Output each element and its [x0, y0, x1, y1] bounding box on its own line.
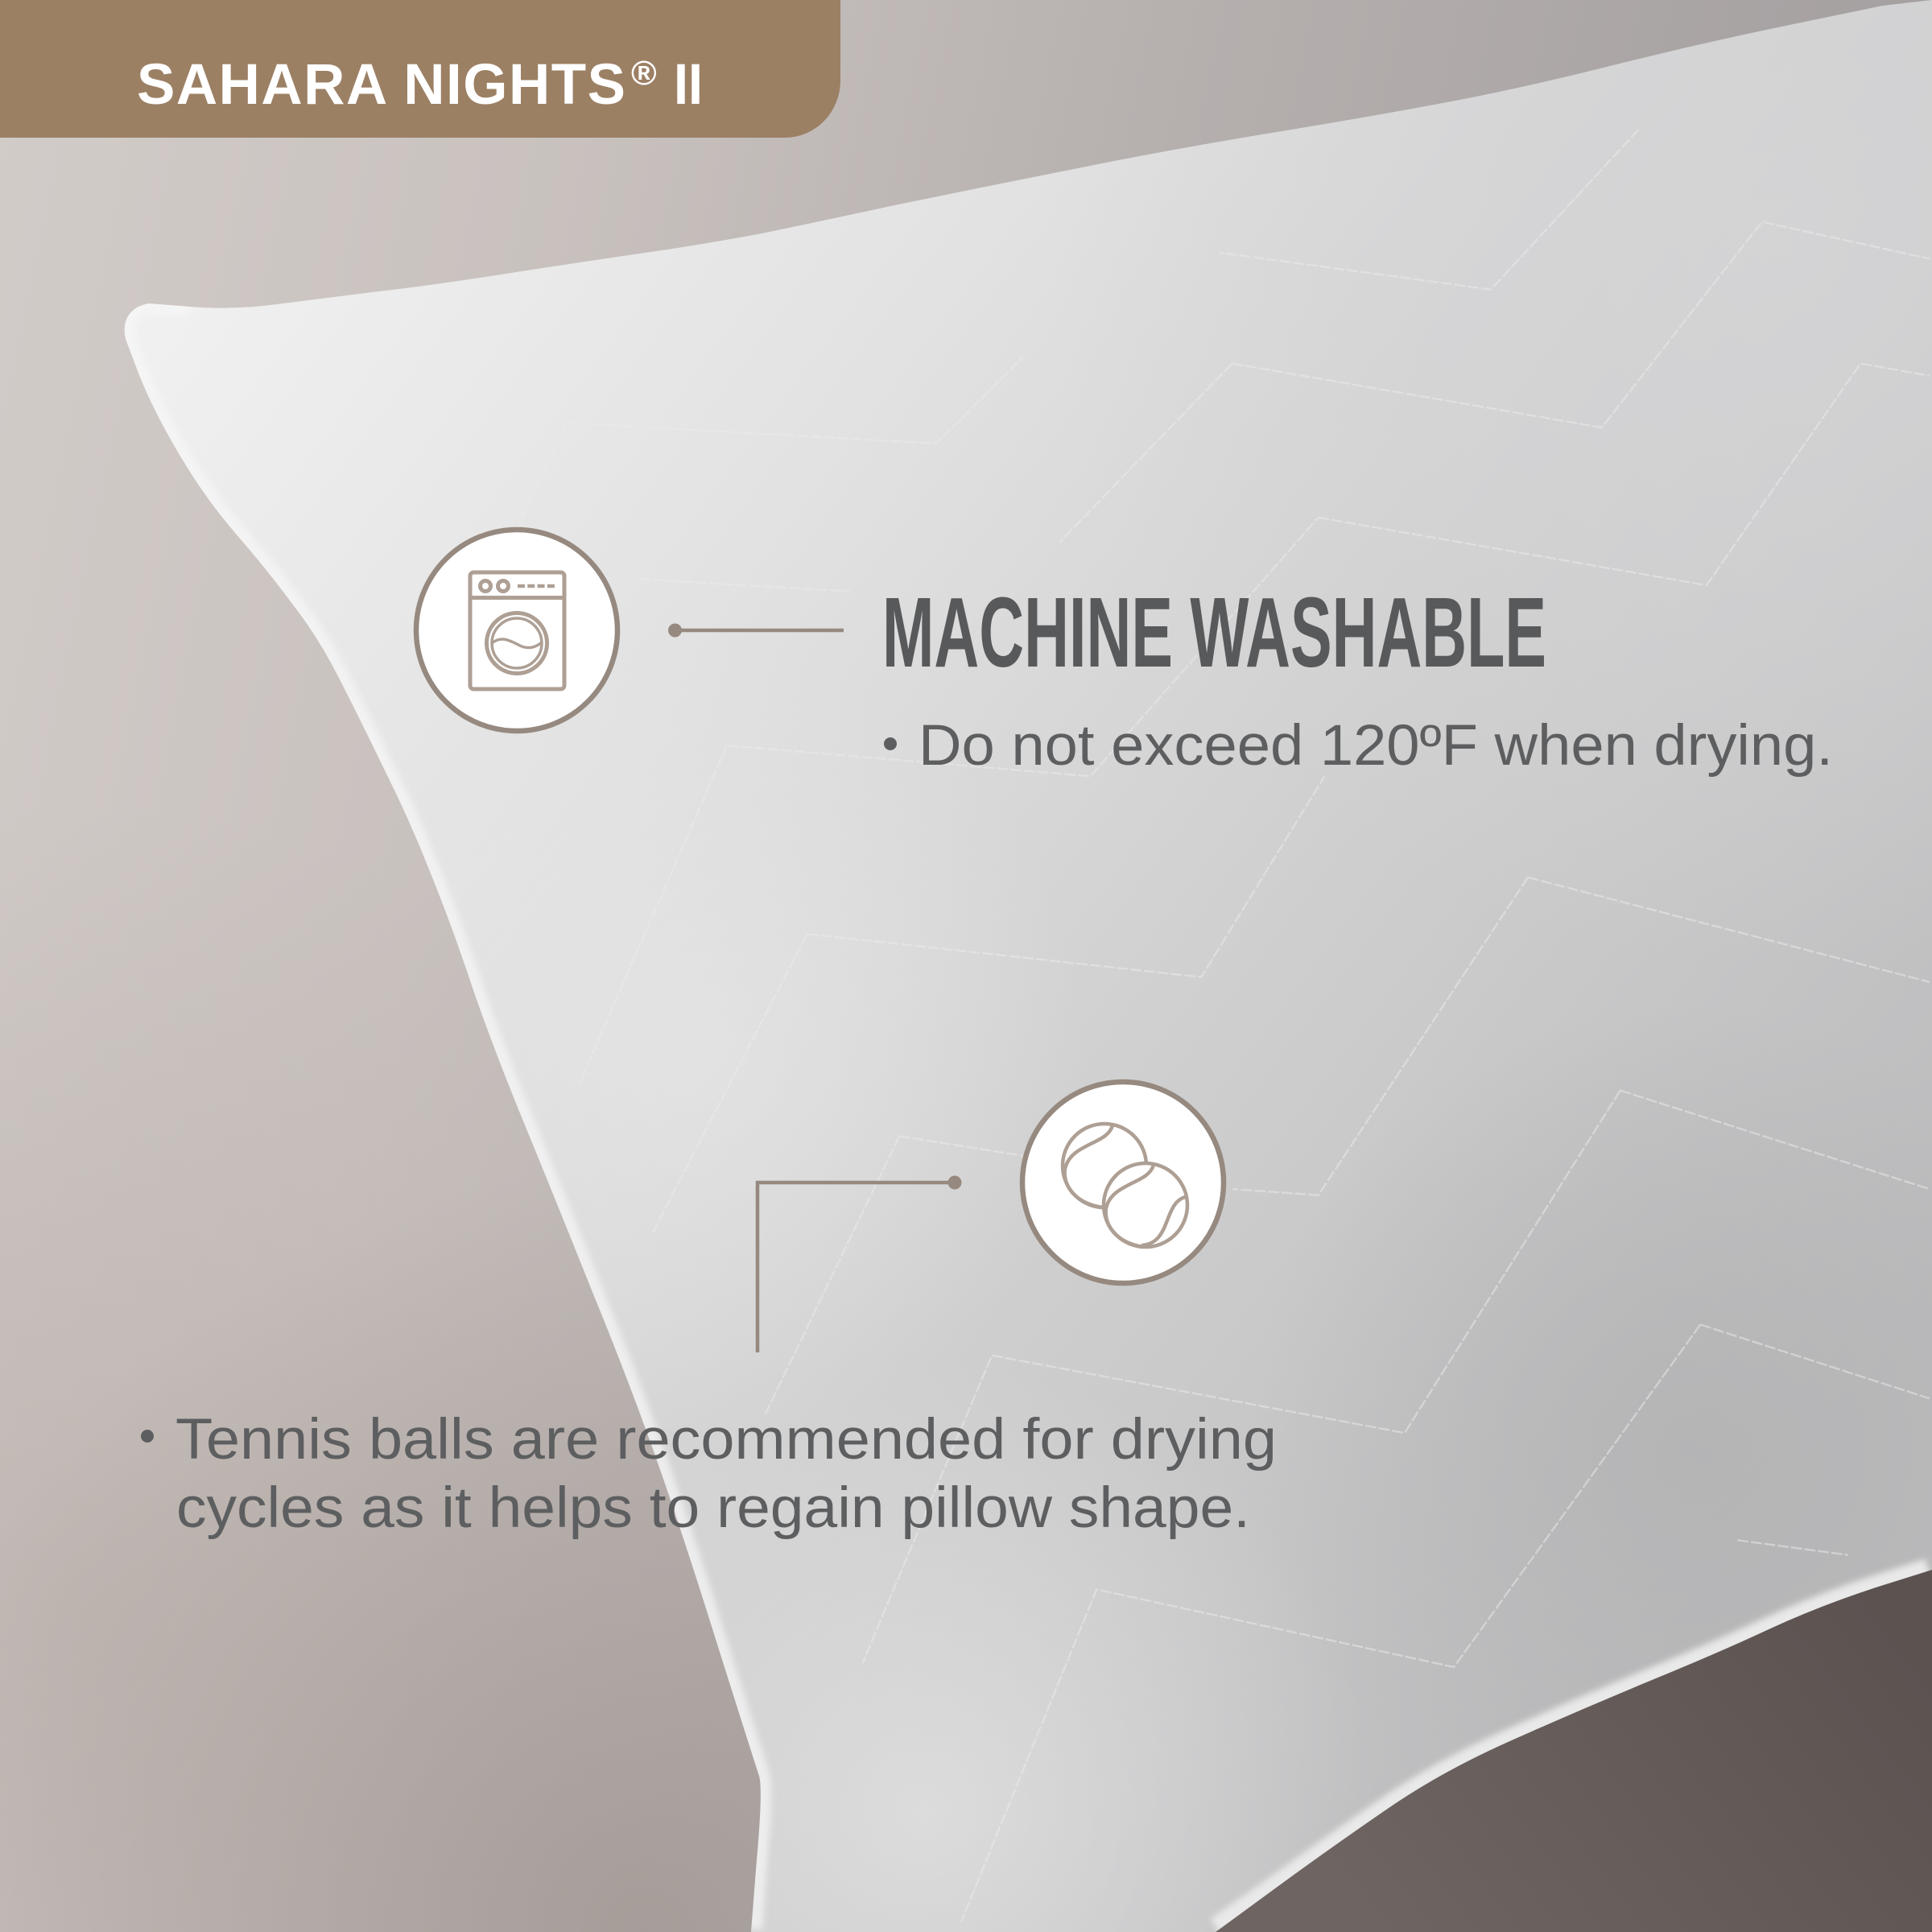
- connector: tennis balls to text: [758, 1175, 961, 1352]
- text block: drying temperature: Do not exceed 120ºF when drying.: [919, 714, 1833, 778]
- connector: washer to heading: [668, 623, 844, 638]
- icon: washing machine: [416, 530, 617, 731]
- heading: machine washable: MACHINE WASHABLE: [882, 578, 1546, 688]
- text block: tennis balls tip: cycles as it helps to regain pillow shape.: [176, 1476, 1250, 1540]
- brand tab: [0, 0, 840, 138]
- text block: tennis balls tip: [141, 1408, 1277, 1540]
- brand title: SAHARA NIGHTS: [137, 53, 625, 117]
- pillow piping edge: [125, 303, 1929, 1929]
- text block: tennis balls tip: Tennis balls are recommended for drying: [175, 1408, 1277, 1472]
- pillow stitching: [487, 130, 1930, 1922]
- icon: tennis balls: [1022, 1082, 1224, 1283]
- brand title: II: [674, 53, 703, 117]
- brand title: ®: [631, 54, 657, 93]
